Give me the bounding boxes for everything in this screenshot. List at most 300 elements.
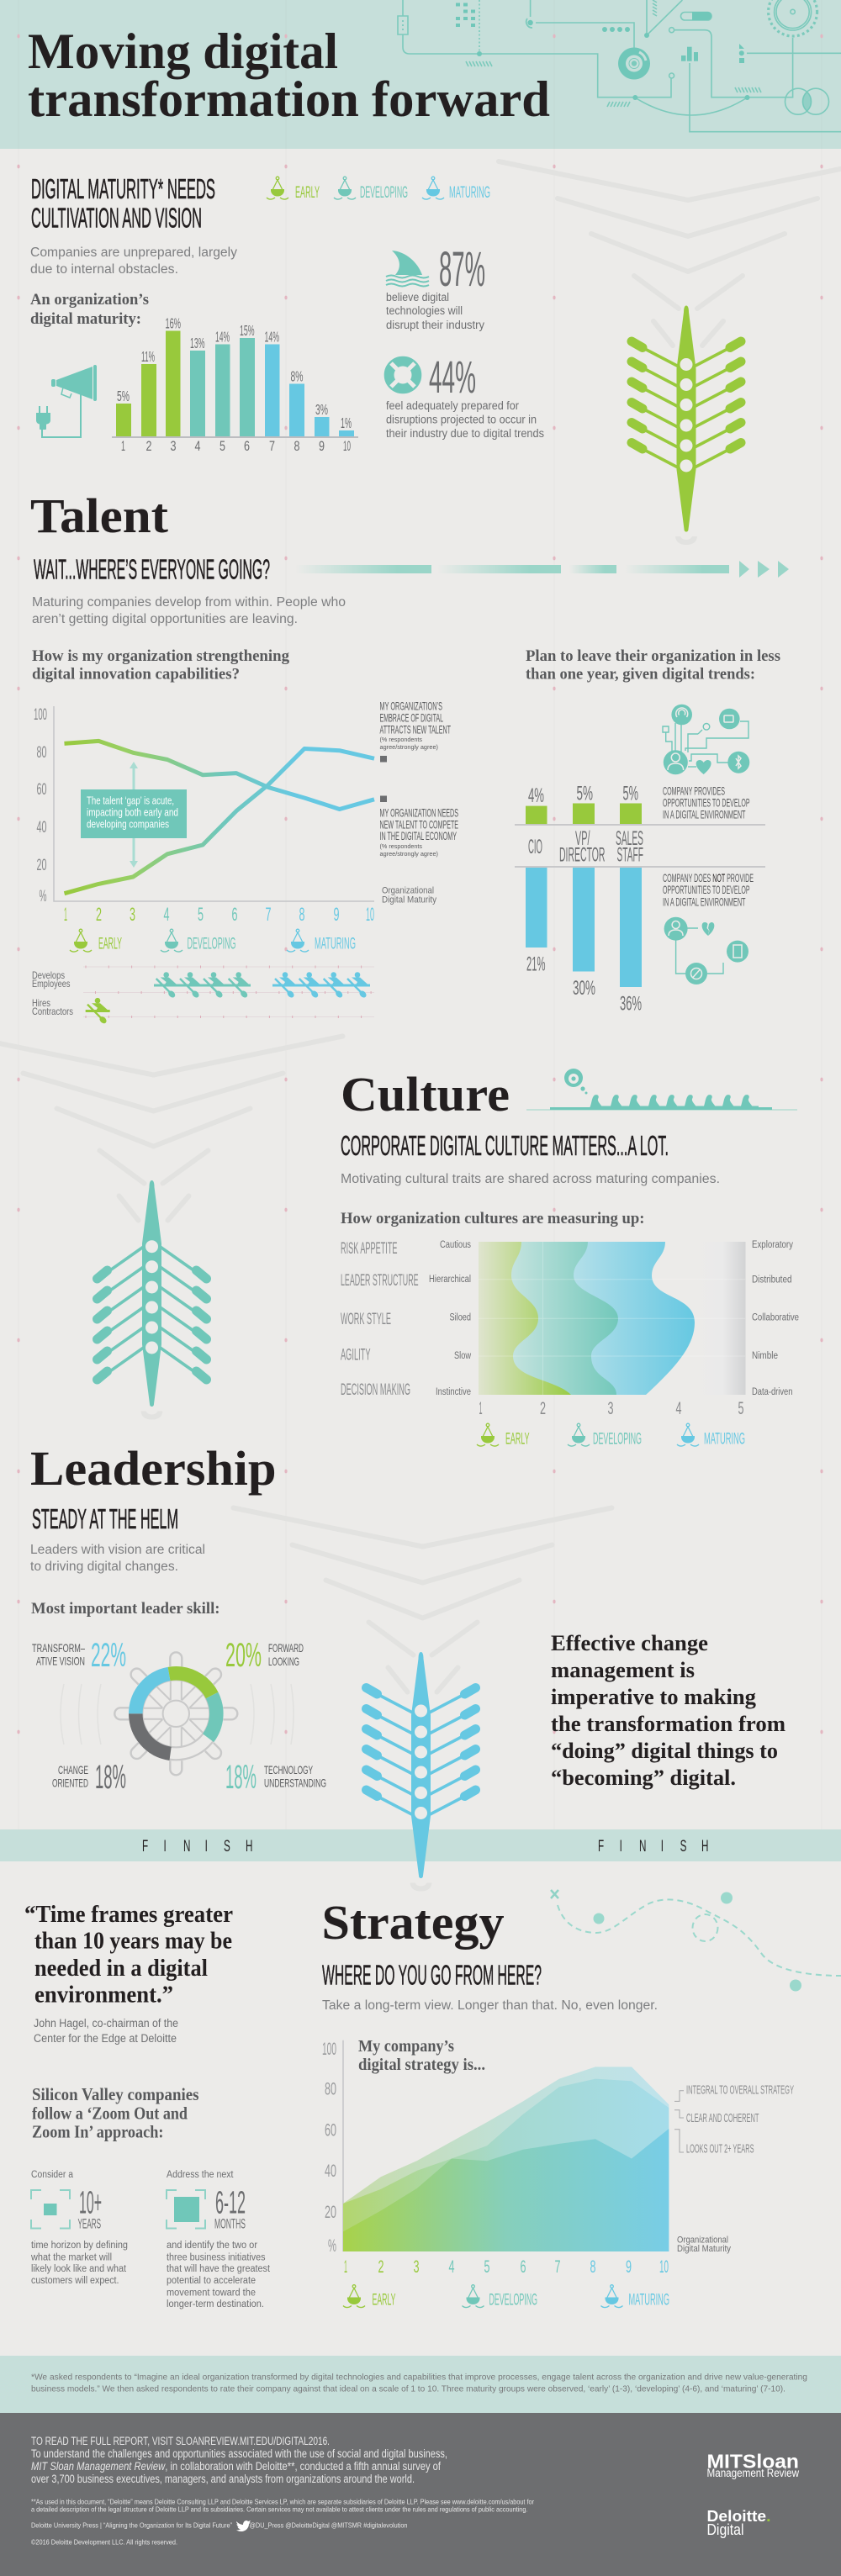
finish band: FINISH [598, 1837, 708, 1855]
line chart: talent [34, 699, 458, 925]
chart heading: culture: How organization cultures are measuring up: [341, 1210, 644, 1227]
logo: Deloitte Digital: Deloitte . [706, 2508, 770, 2525]
bar chart: digital maturity: 3 [170, 439, 177, 454]
intro text: due to internal obstacles. [30, 262, 178, 277]
footnotes: Deloitte University Press | “Aligning the Organization for Its Digital Future” [31, 2521, 232, 2529]
row labels: WORK STYLE [341, 1310, 391, 1328]
arrow: progress bars [295, 561, 789, 578]
x scale: 1 [479, 1399, 483, 1418]
line chart: talent: 3 [130, 904, 135, 925]
label: transformative vision: TRANSFORM– [32, 1641, 85, 1655]
line chart: talent: 60 [37, 780, 47, 799]
line chart: talent: 8 [299, 904, 304, 925]
text: MATURING [449, 183, 490, 202]
arrow: talent gap [130, 762, 138, 868]
series labels: LOOKS OUT 2+ YEARS [686, 2142, 754, 2156]
finish band [0, 1829, 841, 1861]
stat: 87 percent: believe digital [386, 291, 449, 304]
label: technology understanding: UNDERSTANDING [264, 1776, 326, 1789]
label: company provides: COMPANY PROVIDES [663, 784, 725, 797]
callout: talent gap: developing companies [87, 819, 169, 831]
line chart: talent: 4 [163, 904, 170, 925]
chart heading: An organization’s [30, 291, 149, 309]
icon: circuit illustration [398, 0, 841, 132]
axis label: Organizational [677, 2235, 728, 2245]
label: change oriented [52, 1759, 126, 1796]
area chart: culture traits [341, 1239, 799, 1418]
line chart: talent: % [39, 887, 47, 905]
bar chart: plan to leave: CIO [528, 836, 542, 858]
label: company does not provide: IN A DIGITAL ENVIRONMENT [663, 895, 746, 908]
callout: change management quote: management is [551, 1657, 695, 1682]
axis label [382, 886, 436, 905]
line chart: talent: 1 [64, 904, 67, 925]
callout: talent gap: The talent ‘gap’ is acute, [87, 795, 174, 807]
callout: John Hagel quote: needed in a digital [34, 1956, 208, 1982]
talent intro text: aren’t getting digital opportunities are leaving. [32, 612, 298, 626]
label: forward looking: 20% [225, 1637, 262, 1674]
callout: John Hagel quote: Center for the Edge at Deloitte [34, 2032, 177, 2045]
intro text: Companies are unprepared, largely [30, 245, 237, 260]
ring segment: forward looking [169, 1673, 212, 1695]
area: integral to overall strategy [343, 2067, 669, 2251]
label: transformative vision: 22% [91, 1637, 126, 1674]
talent intro text: Maturing companies develop from within. People who [32, 595, 346, 610]
bar chart: digital maturity: 11% [141, 348, 155, 365]
footer [0, 2413, 841, 2576]
legend: talent chart [70, 929, 356, 953]
bar chart: digital maturity: 1% [341, 414, 352, 431]
rowers: develops vs hires: Contractors [32, 1006, 73, 1017]
line chart: talent: 7 [266, 904, 271, 925]
left scale labels: Hierarchical [429, 1275, 471, 1285]
bar chart: digital maturity: 5 [220, 439, 225, 454]
legend: culture chart [477, 1423, 745, 1448]
area chart: digital strategy: 40 [325, 2162, 336, 2181]
label: company does not provide [663, 871, 754, 908]
leadership intro text: Leaders with vision are critical [30, 1543, 205, 1557]
text: MATURING [629, 2290, 669, 2309]
icon: shark fin [386, 251, 429, 286]
footnotes: **As used in this document, “Deloitte” means Deloitte Consulting LLP and Deloitte Services LP, which are separate subsidiaries of Deloitte LLP. Please see www.deloitte.com/us/about for [31, 2497, 534, 2505]
line chart: talent: 10 [366, 904, 374, 925]
axis label: Digital Maturity [677, 2244, 731, 2254]
bar chart: digital maturity: 8 [294, 439, 299, 454]
column: 10+ years [30, 2170, 128, 2286]
left scale labels: Instinctive [436, 1387, 471, 1397]
bar chart: digital maturity [112, 314, 358, 454]
heading: digital maturity: CULTIVATION AND VISION [31, 202, 202, 234]
area chart: digital strategy: 9 [626, 2257, 632, 2277]
left scale labels: Siloed [449, 1313, 471, 1323]
label: attracts talent: (% respondents [380, 736, 422, 743]
chevrons: blue boat wake [234, 1508, 612, 1892]
row labels: DECISION MAKING [341, 1380, 410, 1399]
label: attracts talent: MY ORGANIZATION’S [380, 699, 442, 713]
bar chart: plan to leave: 30% [573, 977, 595, 1000]
logo: MIT Sloan: MITSloan [706, 2450, 799, 2472]
heading: digital maturity [31, 173, 215, 234]
bar chart: digital maturity: 14% [264, 328, 279, 345]
callout: John Hagel quote: “Time frames greater [24, 1902, 233, 1928]
stat: 44 percent [385, 352, 544, 440]
rowers: develops vs hires: Hires [32, 997, 50, 1009]
leadership intro text: to driving digital changes. [30, 1560, 178, 1574]
column: 10+ years: likely look like and what [31, 2264, 127, 2274]
line chart: talent: 6 [232, 904, 237, 925]
row labels [341, 1239, 419, 1399]
icon: no opportunities [664, 917, 748, 984]
icon: zoom out frame [31, 2190, 70, 2228]
bar chart: digital maturity: 9 [319, 439, 325, 454]
methodology note: business models.” We then asked respondents to rate their company against that ideal on a scale of 1 to 10. Three maturity groups were observed, ‘early’ (1-3), ‘developing’ (4-6), and ‘maturing’ (7-10). [31, 2384, 785, 2394]
legend: strategy chart: DEVELOPING [489, 2290, 537, 2309]
label: technology understanding [225, 1759, 326, 1796]
finish band: FINISH [142, 1837, 252, 1855]
logo: MIT Sloan: Management Review [706, 2467, 799, 2479]
leadership intro text [30, 1543, 205, 1574]
chart heading: capabilities: How is my organization strengthening [32, 647, 289, 665]
bar chart: plan to leave: STAFF [617, 844, 643, 866]
heading: zoom out zoom in: Silicon Valley companies [32, 2084, 198, 2104]
area chart: digital strategy: 100 [322, 2040, 336, 2059]
footnotes [31, 2497, 534, 2546]
x scale: 3 [607, 1399, 614, 1418]
right scale labels: Collaborative [752, 1313, 799, 1323]
bar chart: plan to leave: 36% [620, 992, 642, 1016]
label: company provides: IN A DIGITAL ENVIRONMENT [663, 807, 746, 821]
legend: maturity groups: DEVELOPING [360, 183, 408, 202]
column: 10+ years: what the market will [30, 2253, 112, 2263]
area chart: digital strategy: 80 [325, 2080, 336, 2098]
bar chart: plan to leave [515, 782, 765, 1016]
left scale labels: Cautious [440, 1240, 471, 1250]
bar chart: plan to leave: SALES [616, 827, 643, 850]
label: attracts talent: EMBRACE OF DIGITAL [380, 711, 443, 725]
footer text: MIT Sloan Management Review, in collaboration with Deloitte**, conducted a fifth annual survey of [31, 2460, 441, 2473]
x scale: 4 [676, 1399, 682, 1418]
right scale labels: Nimble [752, 1351, 778, 1361]
label: attracts talent [380, 699, 451, 751]
area chart: digital strategy: 4 [449, 2257, 455, 2277]
title: Moving digital [28, 24, 338, 79]
logo: Deloitte Digital [706, 2508, 770, 2538]
legend: maturity groups [267, 177, 490, 202]
label: technology understanding: TECHNOLOGY [264, 1763, 313, 1776]
line chart: talent: 20 [37, 856, 47, 874]
label: needs talent: MY ORGANIZATION NEEDS [380, 805, 458, 819]
footer text: To understand the challenges and opportunities associated with the use of social and digital business, [31, 2447, 447, 2460]
area chart: digital strategy: % [328, 2236, 336, 2256]
label: needs talent [380, 805, 458, 858]
stat: 87 percent: disrupt their industry [386, 319, 484, 331]
legend: talent chart: DEVELOPING [187, 935, 235, 953]
ring segment: transformative vision [135, 1674, 169, 1713]
legend: culture chart: DEVELOPING [593, 1429, 642, 1448]
section heading: leadership: Leadership [30, 1441, 276, 1496]
section heading: culture: Culture [341, 1067, 510, 1122]
chart: ship wheel donut: 18% [95, 1759, 126, 1796]
area chart: digital strategy: 5 [484, 2257, 489, 2277]
bar chart: plan to leave: 5% [622, 782, 638, 805]
bar chart: digital maturity: 16% [165, 314, 181, 331]
column: 6-12 months: movement toward the [167, 2288, 256, 2299]
chart heading [30, 291, 149, 328]
rower: early [86, 998, 110, 1025]
callout: John Hagel quote: than 10 years may be [34, 1929, 232, 1954]
x scale [479, 1399, 743, 1418]
chart title [358, 2037, 485, 2074]
chart heading: capabilities: digital innovation capabilities? [32, 666, 240, 683]
line: attracts new talent [64, 741, 374, 809]
chart heading: capabilities [32, 647, 289, 683]
chart heading: plan to leave: Plan to leave their organization in less [526, 647, 780, 665]
chart heading: leader skill: Most important leader skill: [31, 1600, 220, 1618]
culture intro text: Motivating cultural traits are shared across maturing companies. [341, 1172, 720, 1186]
axis label: Organizational [382, 886, 434, 896]
icon: lifebuoy [385, 356, 420, 393]
footnotes: ©2016 Deloitte Development LLC. All rights reserved. [31, 2537, 177, 2546]
callout: change management quote: Effective change [551, 1630, 708, 1655]
stat: 44 percent: feel adequately prepared for [386, 399, 519, 412]
legend: talent chart: EARLY [98, 935, 122, 953]
footer text: over 3,700 business executives, managers, and analysts from organizations around the world. [31, 2473, 415, 2485]
column: 6-12 months [167, 2170, 271, 2309]
line chart: talent: 2 [96, 904, 102, 925]
chart title: My company’s [358, 2037, 454, 2056]
line chart: talent: 40 [37, 818, 47, 837]
bar chart: digital maturity: 10 [343, 439, 351, 454]
column: 6-12 months: 6-12 [215, 2186, 246, 2221]
icon: dashed route map [551, 1890, 841, 1991]
stat: 44 percent: disruptions projected to occur in [386, 414, 537, 425]
title: transformation forward [28, 71, 550, 127]
column: 10+ years: Consider a [31, 2170, 74, 2180]
bar chart: plan to leave: VP/ [575, 827, 590, 850]
axis label [677, 2235, 731, 2254]
icon: teal boat [98, 1180, 207, 1407]
icon: rowing crew with donut [526, 1069, 797, 1110]
callout: John Hagel quote: John Hagel, co-chairman of the [34, 2017, 178, 2030]
stat: 87 percent: technologies will [386, 304, 463, 317]
legend: maturity groups: EARLY [295, 183, 320, 202]
bar chart: digital maturity: 3% [315, 401, 328, 418]
heading: zoom out zoom in [32, 2084, 198, 2142]
bar chart: digital maturity: 14% [215, 328, 230, 345]
x scale: 2 [540, 1399, 546, 1418]
bar chart: digital maturity: 7 [269, 439, 275, 454]
bar chart: digital maturity: 5% [117, 388, 130, 404]
chart heading: plan to leave: than one year, given digital trends: [526, 666, 755, 683]
footnotes: @DU_Press @DeloitteDigital @MITSMR #digitalevolution [249, 2521, 408, 2529]
callout: John Hagel quote: environment.” [34, 1982, 173, 2008]
rowers: develops vs hires: Develops [32, 969, 65, 981]
ring segment: technology understanding [209, 1695, 216, 1738]
right scale labels: Exploratory [752, 1240, 793, 1250]
column: 6-12 months: MONTHS [214, 2216, 246, 2231]
area chart: digital strategy: 1 [344, 2257, 347, 2277]
bar chart: digital maturity: 6 [244, 439, 250, 454]
methodology note [0, 2356, 841, 2413]
column: 10+ years: YEARS [77, 2216, 101, 2231]
right scale labels: Distributed [752, 1275, 792, 1285]
label: needs talent: NEW TALENT TO COMPETE [380, 817, 458, 831]
bar chart: digital maturity: 2 [146, 439, 151, 454]
column: 6-12 months: Address the next [167, 2170, 234, 2180]
legend: strategy chart [343, 2285, 669, 2309]
column: 10+ years: customers will expect. [31, 2276, 119, 2286]
bar chart: digital maturity: 13% [190, 335, 205, 351]
section heading: strategy: Strategy [321, 1895, 505, 1950]
stat: 87 percent [386, 242, 485, 331]
label: forward looking: LOOKING [268, 1655, 299, 1668]
header band [0, 0, 841, 149]
label: company does not provide: OPPORTUNITIES TO DEVELOP [663, 883, 750, 896]
area chart: digital strategy: 2 [378, 2257, 383, 2277]
label: transformative vision [32, 1637, 126, 1674]
strategy intro text: Take a long-term view. Longer than that. No, even longer. [322, 1998, 658, 2013]
chevrons: green boat wake [499, 161, 841, 545]
column: 6-12 months: three business initiatives [167, 2253, 266, 2263]
icon: green boat [632, 306, 741, 531]
label: company provides [663, 784, 750, 821]
label: attracts talent: ATTRACTS NEW TALENT [380, 723, 451, 736]
rowers: develops vs hires [32, 967, 374, 1025]
rowers: maturing [272, 972, 370, 999]
text: WAIT...WHERE’S EVERYONE GOING? [34, 553, 270, 585]
callout: change management quote: the transformation from [551, 1711, 785, 1736]
logo: Deloitte Digital: Digital [706, 2521, 743, 2538]
heading: zoom out zoom in: Zoom In’ approach: [32, 2122, 163, 2142]
chart: ship wheel donut [32, 1637, 326, 1796]
column: 6-12 months: that will have the greatest [167, 2264, 271, 2274]
label: needs talent: agree/strongly agree) [380, 850, 438, 858]
early bars [116, 331, 180, 436]
area chart: culture traits: LEADER STRUCTURE [341, 1271, 419, 1290]
bar chart: digital maturity: 4 [195, 439, 200, 454]
bar chart: plan to leave: DIRECTOR [559, 844, 606, 866]
legend: culture chart: EARLY [505, 1429, 530, 1448]
chart heading: digital maturity: [30, 310, 141, 328]
left scale labels [429, 1240, 472, 1397]
icon: zoom in frame [167, 2190, 205, 2228]
bar chart: plan to leave: 5% [577, 782, 593, 805]
axis label: Digital Maturity [382, 895, 436, 905]
series labels: CLEAR AND COHERENT [686, 2111, 759, 2125]
label: forward looking: FORWARD [268, 1641, 304, 1655]
stat: 44 percent: 44% [429, 352, 476, 403]
icon: megaphone and plug [36, 365, 97, 437]
series labels [674, 2083, 794, 2156]
label: technology understanding: 18% [225, 1759, 257, 1796]
label: attracts talent: agree/strongly agree) [380, 743, 438, 751]
line chart: talent: 100 [34, 705, 47, 724]
green bars [526, 804, 642, 824]
callout: change management quote [551, 1630, 785, 1790]
text: WHERE DO YOU GO FROM HERE? [322, 1959, 542, 1991]
column: 6-12 months: potential to accelerate [167, 2276, 256, 2286]
callout: change management quote: imperative to making [551, 1684, 756, 1709]
ring segment: change oriented [135, 1713, 171, 1754]
text: MATURING [315, 935, 356, 953]
area chart: digital strategy: 60 [325, 2120, 336, 2141]
callout: John Hagel quote [24, 1902, 233, 2045]
line: needs new talent [64, 748, 374, 894]
right scale labels: Data-driven [752, 1387, 792, 1397]
footer text [31, 2435, 447, 2485]
icon: twitter bird [236, 2521, 251, 2531]
title [28, 24, 550, 127]
label: transformative vision: ATIVE VISION [36, 1655, 85, 1668]
stat: 44 percent: their industry due to digital trends [386, 427, 544, 440]
chevrons: teal boat wake [0, 1036, 343, 1419]
text: 87% [439, 242, 485, 297]
column: 6-12 months: and identify the two or [167, 2241, 257, 2251]
bar chart: digital maturity: 1 [121, 439, 125, 454]
x scale: 5 [738, 1399, 743, 1418]
callout: change management quote: “doing” digital things to [551, 1738, 778, 1763]
area chart: digital strategy: 6 [520, 2257, 526, 2277]
heading: zoom out zoom in: follow a ‘Zoom Out and [32, 2104, 188, 2124]
left scale labels: Slow [454, 1351, 472, 1361]
callout: talent gap: impacting both early and [87, 807, 178, 819]
methodology note: *We asked respondents to “Imagine an ideal organization transformed by digital technologies and capabilities that improve processes, engage talent across the organization and drive new value-generating [31, 2373, 807, 2383]
icon: blue boat [367, 1652, 476, 1878]
callout: change management quote: “becoming” digital. [551, 1765, 736, 1790]
text: MATURING [704, 1429, 745, 1448]
line chart: talent: 9 [333, 904, 340, 925]
text: STEADY AT THE HELM [32, 1503, 178, 1534]
right scale labels [752, 1240, 799, 1397]
line chart: talent: 80 [37, 743, 47, 762]
footnotes: a detailed description of the legal structure of Deloitte LLP and its subsidiaries. Certain services may not available to attest clients under the rules and regulations of public accounting. [31, 2505, 528, 2514]
bar chart: plan to leave: 21% [526, 953, 545, 975]
legend: strategy chart: EARLY [372, 2290, 395, 2309]
bar chart: digital maturity: 8% [291, 368, 303, 385]
talent intro text [32, 595, 346, 626]
footer text: TO READ THE FULL REPORT, VISIT SLOANREVIEW.MIT.EDU/DIGITAL2016. [31, 2435, 330, 2447]
label: company does not provide: COMPANY DOES NOT PROVIDE [663, 871, 754, 884]
area chart: digital strategy: 7 [555, 2257, 560, 2277]
area: clear and coherent [343, 2079, 669, 2251]
intro text [30, 245, 237, 277]
label: needs talent: IN THE DIGITAL ECONOMY [380, 829, 457, 842]
label: company provides: OPPORTUNITIES TO DEVELOP [663, 795, 750, 809]
bar chart: plan to leave: 4% [528, 784, 544, 807]
area chart: digital strategy: 10 [659, 2257, 669, 2277]
area chart: digital strategy [322, 2037, 794, 2277]
area chart: digital strategy: 3 [414, 2257, 419, 2277]
icon: digital opportunities [663, 705, 749, 774]
chart title: digital strategy is... [358, 2056, 485, 2074]
column: 6-12 months: longer-term destination. [167, 2299, 264, 2309]
label: needs talent: (% respondents [380, 842, 422, 850]
area chart: digital strategy: 20 [325, 2203, 336, 2222]
area chart: digital strategy: 8 [590, 2257, 595, 2277]
blue bars [526, 868, 642, 987]
heading: digital maturity: DIGITAL MATURITY* NEEDS [31, 173, 215, 204]
rowers: develops vs hires: Employees [32, 978, 71, 990]
bar chart: digital maturity: 15% [240, 322, 254, 339]
line chart: talent: 5 [198, 904, 204, 925]
rowers: developing [154, 972, 251, 999]
callout: talent gap [81, 789, 187, 838]
section heading: talent: Talent [30, 488, 169, 543]
column: 10+ years: time horizon by defining [31, 2241, 128, 2251]
label: change oriented: CHANGE [58, 1763, 88, 1776]
chart heading: plan to leave [526, 647, 780, 683]
column: 10+ years: 10+ [79, 2186, 102, 2221]
